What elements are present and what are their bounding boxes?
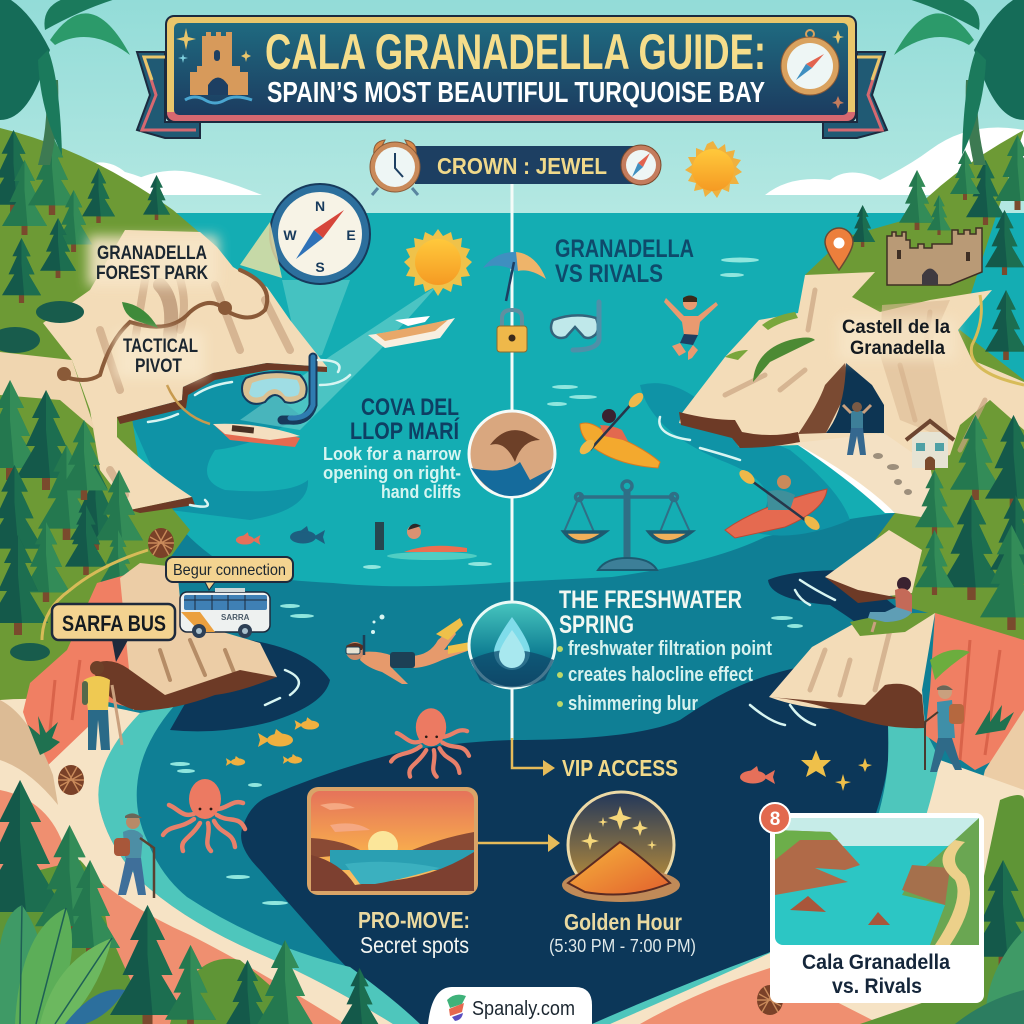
icon: golden fish school <box>226 717 319 766</box>
left land green base <box>0 128 200 705</box>
logo <box>447 995 466 1021</box>
text: cova directions <box>323 444 462 502</box>
sunlight beam <box>240 285 438 430</box>
label: forest park: FOREST PARK <box>96 263 208 284</box>
icon: freshwater spring circle <box>469 602 555 688</box>
panel: sunset picture <box>307 787 478 895</box>
compass beam <box>282 280 350 360</box>
heading: vip access: VIP ACCESS <box>562 755 678 781</box>
right mid small cliff <box>825 530 922 603</box>
dark pocket beside right cliff <box>768 570 900 622</box>
pivot label glow <box>116 332 204 378</box>
icon: floating swimmer <box>375 522 477 560</box>
header banner <box>165 15 857 123</box>
icon: large compass: W <box>283 227 297 243</box>
inset map picture <box>775 818 979 945</box>
text: pro-move: PRO-MOVE: <box>358 907 470 933</box>
icon: house <box>906 421 954 470</box>
salmon sand and tan cliff on left <box>0 700 345 1024</box>
icon: snorkeler <box>346 614 470 684</box>
icon: stars <box>801 750 872 791</box>
icon: left hiker with yellow shirt <box>82 661 122 750</box>
center white divider line <box>510 184 514 740</box>
icon: small snorkel mask <box>551 302 599 350</box>
label: forest park <box>96 243 208 284</box>
caption: Cala Granadella <box>802 951 950 974</box>
label: sarfa bus: SARFA BUS <box>62 611 166 636</box>
right main cliff <box>679 272 1024 465</box>
icon: balance scales <box>564 481 691 570</box>
label: castell de la granadella: Castell de la <box>842 317 950 338</box>
arrow: tactical pivot to boat <box>167 385 210 424</box>
icon: VIP arrowhead <box>543 760 555 776</box>
heading: granadella vs rivals: VS RIVALS <box>555 260 663 288</box>
footer badge: spanaly <box>428 987 592 1024</box>
left upper cliff <box>0 230 327 513</box>
label glow castell <box>838 318 956 360</box>
heading: the freshwater spring: SPRING <box>559 611 634 639</box>
text: cova directions: hand cliffs <box>381 482 461 502</box>
icon: large compass: E <box>346 227 356 243</box>
plant by left cliff <box>28 716 60 755</box>
bullet list: spring facts: creates halocline effect <box>568 664 753 686</box>
palm top-right <box>894 0 1024 165</box>
lower left trees <box>0 780 379 1024</box>
heading: cova del llop mari: LLOP MARÍ <box>350 417 460 445</box>
icon: header stars <box>176 28 844 109</box>
icon: pinecone by inset <box>757 985 783 1015</box>
white water ripples <box>148 360 835 725</box>
bullet list: spring facts: shimmering blur <box>568 693 698 715</box>
badge: 8 <box>760 803 790 833</box>
icon: kayak red <box>725 467 827 538</box>
label: castell de la granadella <box>842 317 950 359</box>
icon: large snorkel mask <box>242 357 313 420</box>
deeper patch around kayak <box>640 383 850 536</box>
heading: granadella vs rivals <box>555 235 694 288</box>
left beach <box>0 699 393 1024</box>
heading: cova del llop mari <box>350 394 460 445</box>
icon: octopus left <box>163 779 245 851</box>
deep navy water <box>241 640 900 1024</box>
icon: castle <box>887 228 982 285</box>
icon: sun beside compass <box>404 229 472 296</box>
icon: white boat <box>368 316 455 348</box>
icon: sea cave circle <box>469 411 555 497</box>
icon: padlock <box>497 310 527 352</box>
heading: the freshwater spring: THE FRESHWATER <box>559 586 742 614</box>
badge: 8: 8 <box>770 809 780 830</box>
icon: dark fish <box>290 526 325 544</box>
icon: large compass: N <box>315 198 325 214</box>
icon: pink fish <box>236 532 260 545</box>
dark pocket beside bus cliff <box>170 640 330 731</box>
label: tactical pivot <box>123 336 198 377</box>
left coast shallow strip <box>96 705 420 1024</box>
green hill bottom <box>170 959 310 1024</box>
icon: sarfa bus: SARRA <box>221 613 250 622</box>
icon: person at cave <box>843 402 871 455</box>
subtitle: SPAIN’S MOST BEAUTIFUL TURQUOISE BAY <box>267 77 765 109</box>
yellow compass beam on cliff <box>240 222 282 278</box>
label: forest park: GRANADELLA <box>97 243 207 264</box>
icon: sandcastle <box>185 32 252 103</box>
green hill lower left <box>0 860 150 1024</box>
label: sarfa bus <box>52 604 175 662</box>
label: tactical pivot: TACTICAL <box>123 336 198 357</box>
icon: red boat <box>213 424 300 447</box>
text: pro-move <box>358 907 470 958</box>
bullet list: spring facts <box>557 638 772 715</box>
label: tactical pivot: PIVOT <box>135 356 182 377</box>
icon: location pin <box>825 228 853 270</box>
heading: granadella vs rivals: GRANADELLA <box>555 235 694 263</box>
arrow: sunset to golden hour <box>478 834 560 852</box>
left lower cliff, bus ledge <box>23 563 277 770</box>
sky background <box>0 0 1024 214</box>
green bush on cliff <box>122 302 158 328</box>
water ripples <box>170 258 803 905</box>
clouds <box>0 128 1024 195</box>
left forest trees <box>0 130 170 635</box>
title: CALA GRANADELLA GUIDE: <box>265 24 766 80</box>
icon: octopus right <box>391 708 469 777</box>
label: castell de la granadella: Granadella <box>850 338 945 359</box>
icon: sarfa bus <box>180 588 270 638</box>
right land green base <box>805 130 1024 640</box>
icon: red fish <box>740 766 775 784</box>
text: golden hour: Golden Hour <box>564 909 682 935</box>
palm top-left <box>0 0 130 165</box>
label: begur connection: Begur connection <box>173 562 286 579</box>
heading: cova del llop mari: COVA DEL <box>361 394 459 421</box>
sea: shallow turquoise area <box>0 213 1024 586</box>
left dark shrubs <box>0 301 84 661</box>
right lower cliff <box>769 613 1024 800</box>
icon: hiker on path <box>114 813 154 898</box>
icon: golden sand mound <box>562 792 680 902</box>
gold connector to VIP access <box>512 738 546 768</box>
lower right palm leaves <box>955 930 1024 1024</box>
icon: cliff jumper <box>664 296 718 360</box>
label: crown jewel: CROWN : JEWEL <box>437 153 607 179</box>
yellow path left <box>42 550 148 640</box>
large tropical leaves lower left <box>0 905 125 1024</box>
icon: small compass <box>621 145 661 185</box>
panel: inset card vs rivals: vs. Rivals <box>832 975 922 998</box>
header ribbon tails <box>137 52 887 138</box>
icon: kayak yellow <box>577 390 660 468</box>
text: cova directions: opening on right- <box>323 463 461 483</box>
yellow path right <box>971 295 1024 385</box>
icon: large compass: S <box>315 259 325 275</box>
shallow water patch near boat <box>120 375 308 520</box>
right beach with stones <box>795 433 940 520</box>
icon: large compass <box>270 184 370 284</box>
icon: pinecone near bus <box>148 528 174 558</box>
crown jewel pill <box>415 146 635 184</box>
right coast shallow strip <box>592 625 940 1024</box>
right bottom shore and land <box>610 760 1024 1024</box>
text: pro-move: Secret spots <box>360 932 469 958</box>
icon: pinecone on beach <box>58 765 84 795</box>
icon: winding trail on cliff <box>59 270 267 380</box>
sea: mid blue base <box>0 213 1024 1024</box>
text: golden hour <box>549 909 696 956</box>
icon: beach umbrella <box>483 252 546 301</box>
right forest trees <box>850 135 1024 970</box>
cliff label glow <box>88 236 218 286</box>
bullet list: spring facts: freshwater filtration point <box>568 638 772 660</box>
text: golden hour: (5:30 PM - 7:00 PM) <box>549 936 696 956</box>
icon: sun top <box>685 141 742 198</box>
panel: inset card vs rivals <box>760 803 984 1003</box>
icon: alarm clock <box>370 140 420 195</box>
label: begur connection <box>166 557 293 590</box>
icon: sitting woman <box>868 577 912 632</box>
text: cova directions: Look for a narrow <box>323 444 462 464</box>
icon: right hiker <box>925 685 964 772</box>
heading: the freshwater spring <box>559 586 742 639</box>
plant on right cliff <box>975 705 1014 735</box>
icon: pocket compass <box>781 30 839 95</box>
footer badge: spanaly: Spanaly.com <box>472 998 575 1020</box>
